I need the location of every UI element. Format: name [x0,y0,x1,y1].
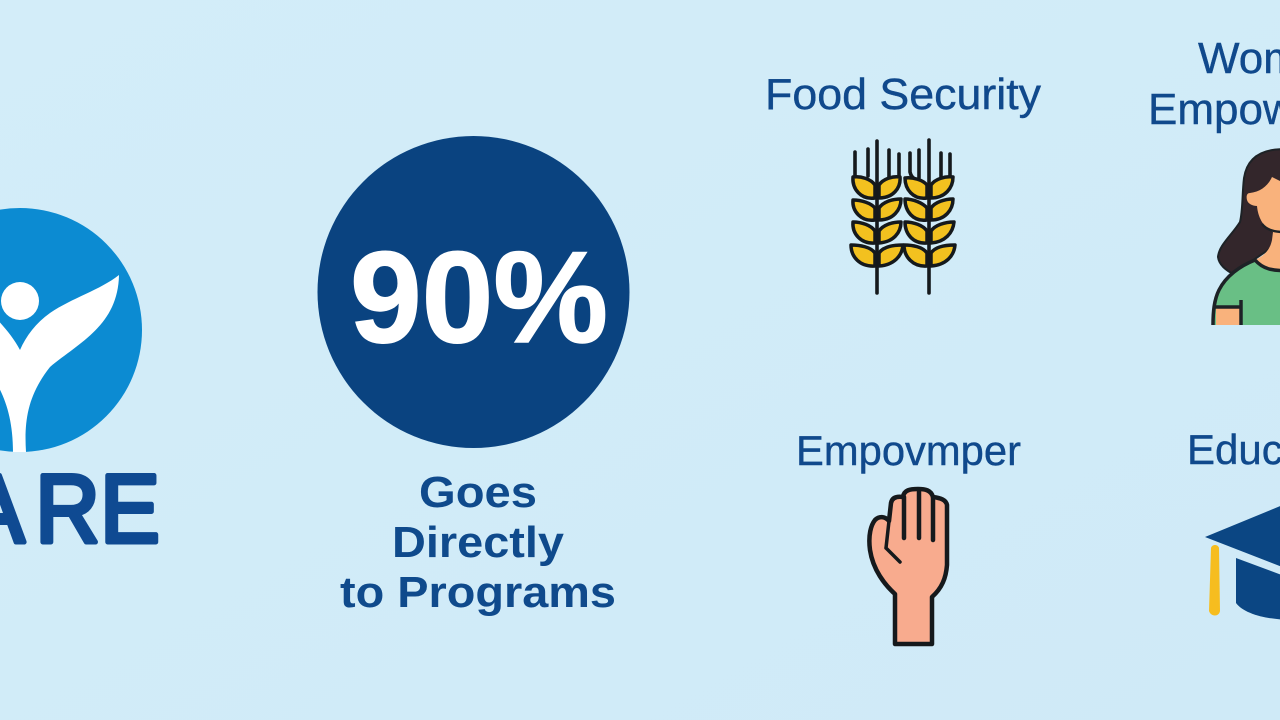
stat number: 90% [350,224,608,370]
icon: woman [1213,149,1280,325]
stat caption: Directly [392,518,565,567]
chin line [1262,224,1280,232]
stat caption: to Programs [340,568,616,617]
cap base [1236,558,1280,620]
heading: Food Security: Food Security [765,70,1041,119]
sleeve line [1215,300,1241,325]
icon: raised hand [869,489,947,644]
shirt [1213,260,1280,325]
icon: graduation cap [1205,500,1280,620]
icon: wheat [851,140,955,293]
cap top [1205,500,1280,572]
cap tassel [1209,545,1220,616]
hair [1218,149,1280,274]
face and neck [1247,177,1280,300]
stat caption: Goes [419,468,537,517]
90% statistic [318,136,630,448]
logo circle emblem [0,208,142,452]
CARE logo [0,208,160,563]
shirt outline [1213,260,1280,325]
arm [1216,307,1240,325]
stat caption [340,468,616,617]
heading: Empowerment: Empovmper [796,427,1021,474]
stat circle [318,136,630,448]
heading: Women Empowerment [1148,34,1280,134]
